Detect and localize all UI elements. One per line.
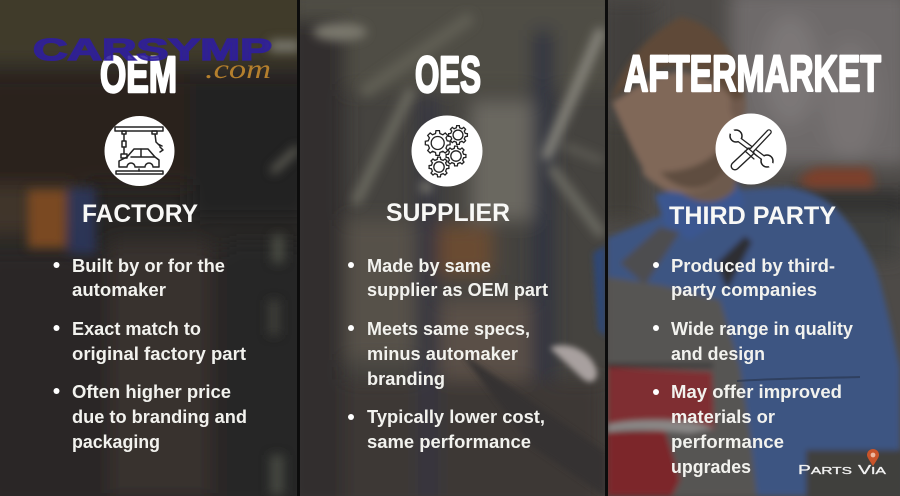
bullets: OES: Made by same	[367, 255, 491, 276]
logo: CARSYMP.com: CARSYMP	[33, 32, 272, 67]
icon: gears	[412, 116, 482, 186]
subheading: THIRD PARTY: THIRD PARTY	[669, 202, 836, 230]
bullets: OEM: Often higher price	[72, 381, 231, 402]
bullets: AFTERMARKET: Wide range in quality	[671, 318, 854, 339]
logo: Parts Via: P ARTS	[798, 462, 852, 477]
panel: OEM background	[0, 0, 320, 496]
bullets: OES	[348, 255, 548, 452]
logo: CARSYMP.com	[33, 32, 272, 84]
bullets: OEM: automaker	[72, 279, 166, 300]
bullets: OES: same performance	[367, 431, 531, 452]
apron	[607, 277, 757, 496]
bullets: AFTERMARKET	[653, 255, 854, 477]
title: OEM: OEM	[100, 46, 177, 103]
neck and face	[682, 171, 740, 206]
bullets: OEM: Built by or for the	[72, 255, 225, 276]
bullets: OEM: packaging	[72, 431, 160, 452]
logo: Parts Via: V IA	[858, 462, 886, 477]
shirt	[607, 187, 900, 496]
subheading: SUPPLIER: SUPPLIER	[386, 199, 510, 227]
icon: crossed wrench and screwdriver	[716, 114, 786, 184]
glove	[607, 430, 680, 496]
title: OES: OES	[415, 46, 481, 103]
red pocket	[608, 367, 714, 430]
hair	[610, 17, 745, 103]
bullets: OEM: due to branding and	[72, 406, 247, 427]
panel: AFTERMARKET background	[600, 0, 900, 496]
bullets: OES: Typically lower cost,	[367, 406, 545, 427]
panel divider: left	[297, 0, 300, 496]
bullets: OES: supplier as OEM part	[367, 279, 548, 300]
bullets: AFTERMARKET: Produced by third-	[671, 255, 835, 276]
panel: OES background	[285, 0, 620, 496]
bullets: OEM: Exact match to	[72, 318, 201, 339]
ear	[730, 96, 748, 117]
bullets: OEM	[54, 255, 247, 452]
bullets: AFTERMARKET: materials or	[671, 406, 775, 427]
bullets: AFTERMARKET: party companies	[671, 279, 817, 300]
bullets: OEM: original factory part	[72, 343, 246, 364]
bullets: AFTERMARKET: and design	[671, 343, 765, 364]
bullets: OES: branding	[367, 368, 445, 389]
logo: Parts Via	[798, 449, 886, 477]
straps	[620, 227, 680, 285]
icon: factory robot and car	[104, 116, 174, 186]
logo: CARSYMP.com: .com	[205, 54, 271, 84]
panel divider: right	[605, 0, 608, 496]
bullets: OES: Meets same specs,	[367, 318, 530, 339]
bullets: AFTERMARKET: upgrades	[671, 456, 751, 477]
bullets: AFTERMARKET: May offer improved	[671, 381, 842, 402]
subheading: FACTORY: FACTORY	[82, 200, 198, 228]
bullets: OES: minus automaker	[367, 343, 518, 364]
bullets: AFTERMARKET: performance	[671, 431, 784, 452]
